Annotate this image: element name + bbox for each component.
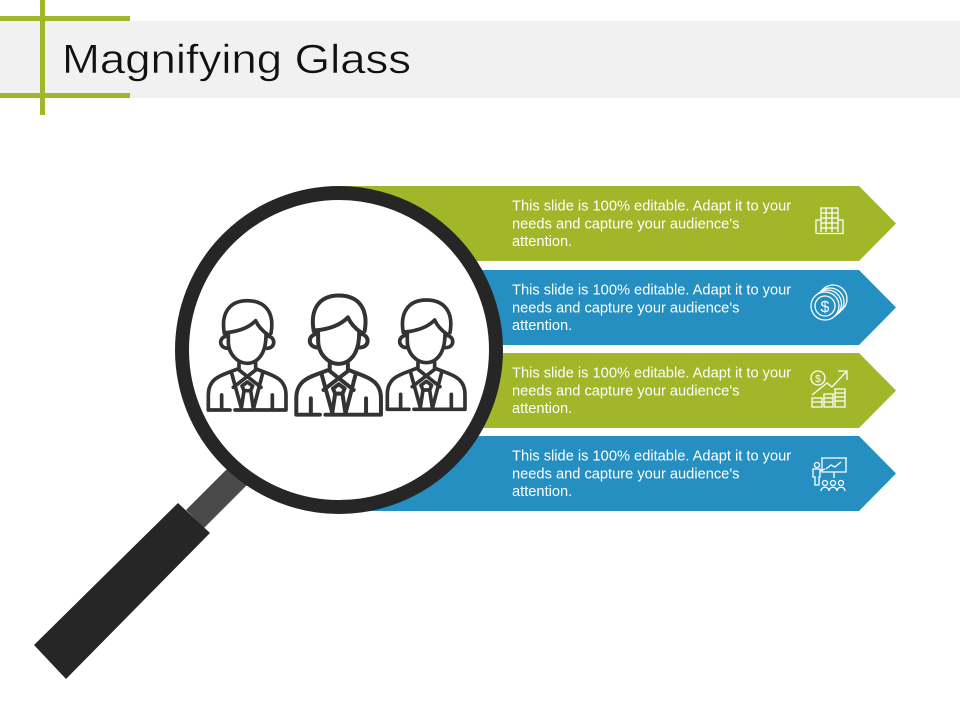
arrow panel 3: attention. [512,401,572,417]
icon: coins [811,285,847,320]
arrow panel 1: needs and capture your audience's [512,216,739,232]
magnifying glass [34,193,496,679]
handle grip [34,503,210,679]
arrow panel 3: This slide is 100% editable. Adapt it to your [512,366,791,382]
icon: three business people [208,296,465,415]
arrow panel 4: This slide is 100% editable. Adapt it to your [512,448,791,464]
arrow panel 1: This slide is 100% editable. Adapt it to your [512,198,791,214]
icon: office building [816,208,843,234]
icon: growth chart [811,371,847,407]
lens [182,193,496,507]
arrow panel 2: This slide is 100% editable. Adapt it to your [512,282,791,298]
arrow panel 2: needs and capture your audience's [512,300,739,316]
title: Magnifying Glass [62,36,411,82]
handle neck [186,464,250,528]
arrow panel 1 [340,186,896,261]
arrow panel 2: attention. [512,318,572,334]
arrow panel 4: attention. [512,484,572,500]
person middle [296,296,381,415]
person right [387,300,465,409]
icon: presentation [813,458,847,491]
person left [208,301,286,410]
arrow panel 2 [340,270,896,345]
title banner [0,0,960,115]
arrow panel 4: needs and capture your audience's [512,466,739,482]
arrow panel 4 [340,436,896,511]
arrow panel 3 [340,353,896,428]
icon: coins: $ [821,299,830,316]
arrow panel 3: needs and capture your audience's [512,384,739,400]
icon: growth chart: $ [815,374,821,385]
arrow panel 1: attention. [512,234,572,250]
